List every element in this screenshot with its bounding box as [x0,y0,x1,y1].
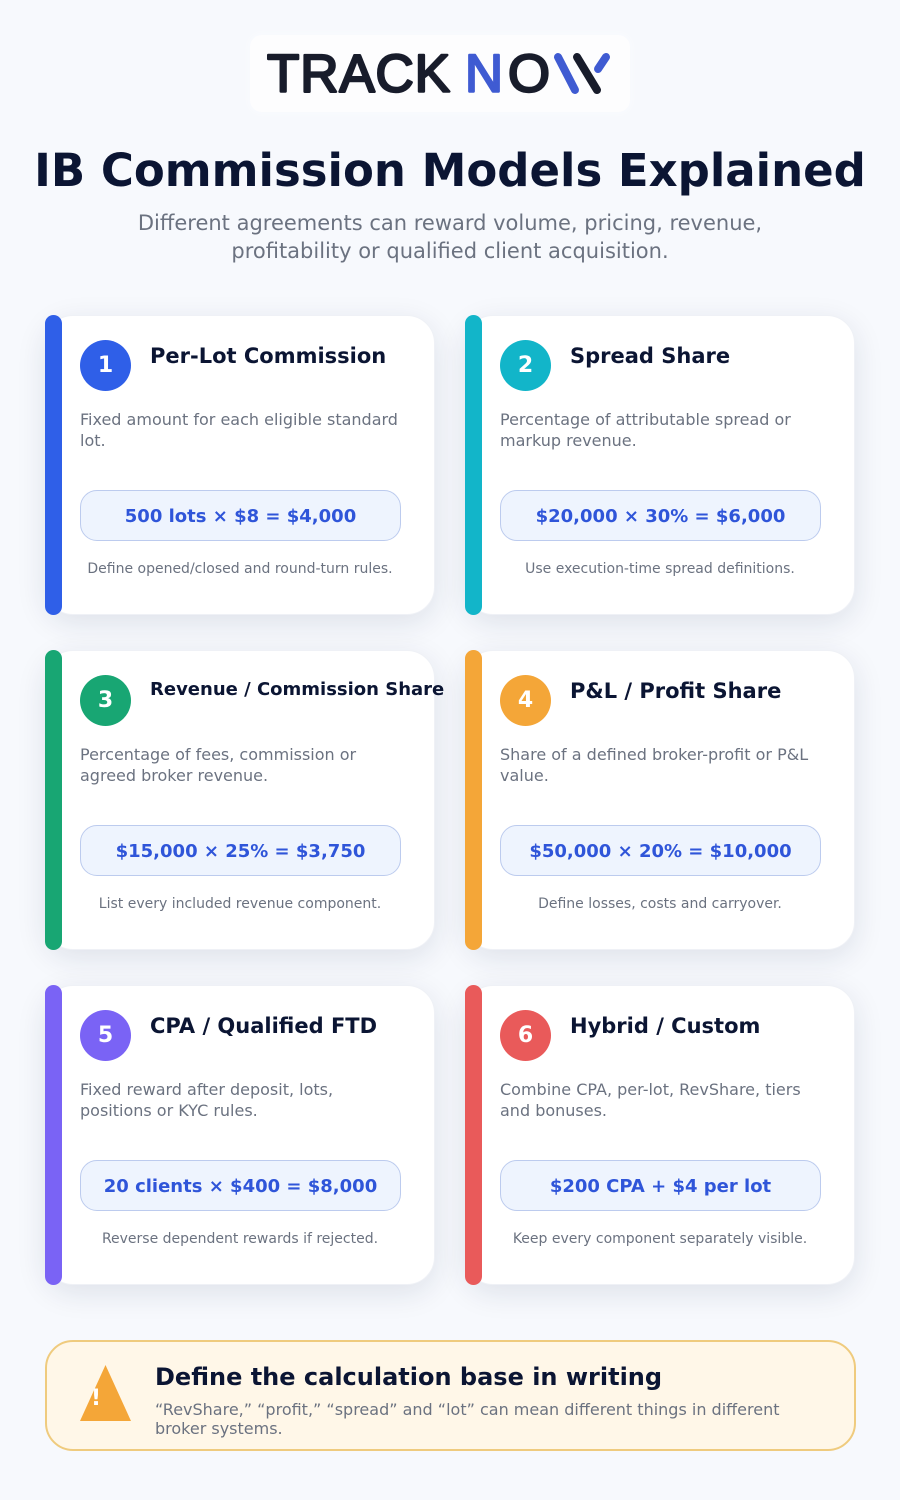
formula pill [500,490,821,541]
formula pill: 20 clients × $400 = $8,000 [104,1176,377,1197]
number badge 6: 6 [518,1023,533,1048]
panel: per-lot commission [38,315,442,630]
number badge 4 [500,675,551,726]
formula pill: $50,000 × 20% = $10,000 [529,841,792,862]
title: IB Commission Models Explained [34,144,866,197]
formula pill [80,825,401,876]
description: Fixed reward after deposit, lots, positions or KYC rules. [80,1080,333,1120]
note: Reverse dependent rewards if rejected. [102,1231,378,1247]
number badge 4: 4 [518,688,533,713]
number badge 3 [80,675,131,726]
number badge 5 [80,1010,131,1061]
note: Define opened/closed and round-turn rules. [87,561,393,577]
panel: spread share [458,315,862,630]
icon: warning triangle [80,1365,131,1421]
number badge 1: 1 [98,353,113,378]
note: Keep every component separately visible. [513,1231,807,1247]
logo: O [508,44,550,104]
heading: hybrid / custom: Hybrid / Custom [570,1014,760,1038]
note: Use execution-time spread definitions. [525,561,795,577]
subtitle: profitability or qualified client acquisition. [231,239,669,263]
panel: revenue / commission share [38,650,444,965]
subtitle: Different agreements can reward volume, pricing, revenue, [138,211,762,235]
number badge 5: 5 [98,1023,113,1048]
number badge 6 [500,1010,551,1061]
formula pill: 500 lots × $8 = $4,000 [125,506,356,527]
heading: cpa / qualified ftd: CPA / Qualified FTD [150,1014,377,1038]
heading: revenue / commission share: Revenue / Commission Share [150,679,444,700]
number badge 1 [80,340,131,391]
note: Define losses, costs and carryover. [538,896,782,912]
description: Percentage of fees, commission or agreed broker revenue. [80,745,356,785]
formula pill [80,490,401,541]
callout text: “RevShare,” “profit,” “spread” and “lot” can mean different things in different broker systems. [155,1400,780,1438]
panel: cpa / qualified ftd [38,985,442,1300]
formula pill [80,1160,401,1211]
panel: p&l / profit share [458,650,862,965]
description: Percentage of attributable spread or markup revenue. [500,410,791,450]
heading: p&l / profit share: P&L / Profit Share [570,679,781,703]
formula pill: $15,000 × 25% = $3,750 [116,841,365,862]
heading: spread share: Spread Share [570,344,730,368]
number badge 2: 2 [518,353,533,378]
logo [250,35,630,112]
formula pill: $200 CPA + $4 per lot [550,1176,771,1197]
callout: define the calculation base [45,1340,856,1451]
panel: hybrid / custom [458,985,862,1300]
description: Combine CPA, per-lot, RevShare, tiers and bonuses. [500,1080,801,1120]
note: List every included revenue component. [99,896,381,912]
callout heading: Define the calculation base in writing [155,1363,662,1391]
formula pill [500,825,821,876]
icon: warning triangle: ! [91,1386,101,1411]
logo: N [465,44,503,104]
formula pill [500,1160,821,1211]
number badge 3: 3 [98,688,113,713]
description: Fixed amount for each eligible standard lot. [80,410,398,450]
subtitle [138,211,762,263]
formula pill: $20,000 × 30% = $6,000 [536,506,785,527]
heading: per-lot commission: Per-Lot Commission [150,344,386,368]
logo: TRACK [267,44,450,104]
number badge 2 [500,340,551,391]
description: Share of a defined broker-profit or P&L value. [500,745,808,785]
